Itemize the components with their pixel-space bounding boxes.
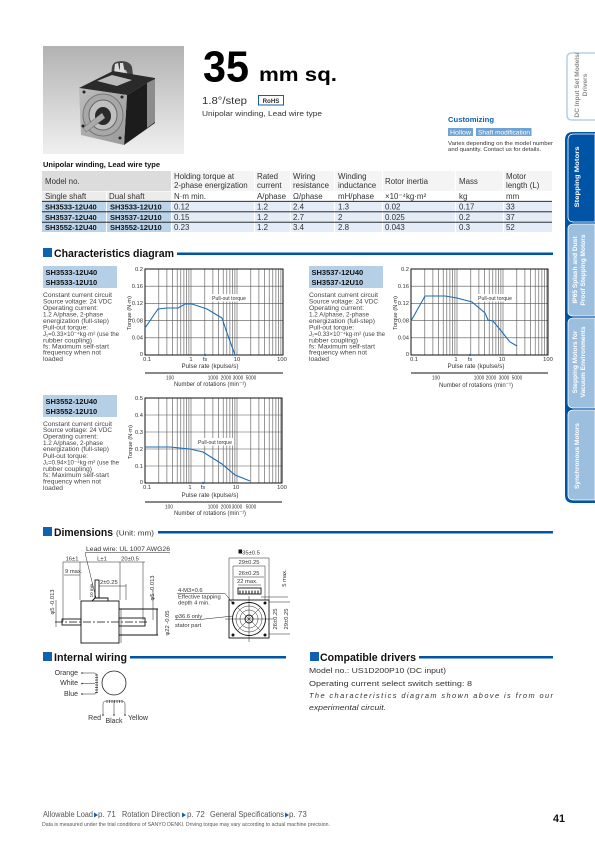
drawing: motor side view (50, 546, 171, 643)
spec table: 1.2 (257, 213, 268, 222)
table title: Unipolar winding, Lead wire type (43, 160, 160, 169)
chart: SH3552 pull-out torque (128, 396, 287, 517)
spec table: 0.2 (459, 213, 470, 222)
text block: SH3537 conditions: fs: Maximum self-start (309, 344, 375, 350)
spec table: Rated (257, 172, 278, 181)
chart: SH3537 pull-out torque: 10 (499, 357, 505, 363)
callout: mounting holes (175, 588, 233, 629)
side tabs: motor categories (565, 132, 595, 503)
drawing: motor front view: 26±0.25 (239, 571, 259, 577)
spec table: SH3552-12U40 (45, 223, 97, 232)
drawing: motor side view: φ5 -0.013 (150, 575, 156, 601)
text block: SH3533 conditions: J₁=0.33×10⁻⁴kg·m² (use the (43, 331, 119, 338)
chart: SH3533 pull-out torque: 0.12 (132, 301, 143, 307)
drawing: motor side view: 2±0.25 (100, 580, 118, 586)
title: 35 (203, 42, 249, 92)
spec table: 0.02 (385, 202, 400, 212)
spec table: 0.043 (385, 223, 405, 232)
chart: SH3552 pull-out torque: 0.5 (135, 396, 143, 402)
spec table: mH/phase (338, 192, 375, 201)
chart: SH3552 pull-out torque: 0.1 (135, 464, 143, 470)
heading: compatible drivers (310, 652, 553, 664)
chart: SH3533 pull-out torque (127, 267, 287, 388)
spec table: SH3537-12U40 (45, 213, 97, 222)
tab: stepping motors (568, 134, 595, 222)
drawing: motor side view: L±1 (97, 556, 107, 562)
text block: SH3537 conditions: Pull-out torque: (309, 324, 354, 332)
wiring diagram: White (60, 680, 78, 687)
spec table: Ω/phase (293, 192, 323, 201)
drawing: motor front view: 22 max. (237, 579, 258, 585)
chart: SH3537 pull-out torque: 1000 (474, 376, 484, 382)
chart: SH3552 pull-out torque: 1000 (208, 504, 218, 510)
heading: internal wiring (43, 652, 286, 664)
chart: SH3533 pull-out torque: 2000 (221, 376, 231, 382)
drawing: motor front view (225, 550, 290, 642)
text block: SH3552 conditions: 1.2 A/phase, 2-phase (43, 440, 103, 447)
title (203, 42, 337, 92)
spec table: 1.2 (257, 202, 268, 212)
text block: SH3552 conditions: Operating current: (43, 434, 98, 440)
heading: compatible drivers: Compatible drivers (320, 652, 416, 664)
chart: SH3537 pull-out torque: 0.12 (398, 301, 409, 307)
chart: SH3537 pull-out torque: 100 (432, 376, 440, 382)
spec table: Holding torque at (174, 172, 235, 181)
chart: SH3533 pull-out torque: 3000 (233, 376, 243, 382)
spec table: current (257, 181, 282, 190)
text block: compatible drivers: Operating current select switch setting: 8 (309, 679, 472, 688)
tab: vacuum stepping motors (568, 318, 595, 408)
spec table: SH3533-12U10 (110, 202, 162, 212)
chart: SH3537 pull-out torque: 3000 (499, 376, 509, 382)
text block: SH3537 conditions (309, 292, 385, 363)
text block: SH3537 conditions: loaded (309, 356, 329, 363)
callout: mounting holes: depth 4 min. (178, 600, 210, 606)
spec table: 1.2 (257, 223, 268, 232)
wiring diagram: Orange (55, 670, 78, 677)
customizing block: and quantity. Contact us for details. (448, 147, 541, 153)
chart: SH3552 pull-out torque: 0.2 (135, 447, 143, 453)
chart: SH3552 pull-out torque: Number of rotations (min⁻¹) (174, 510, 246, 517)
heading: dimensions: (Unit: mm) (116, 530, 154, 538)
chart: SH3533 pull-out torque: 100 (166, 376, 174, 382)
customizing block: Customizing (448, 115, 494, 124)
spec table: mm (506, 192, 520, 201)
chart: SH3533 pull-out torque: 0.1 (143, 357, 151, 363)
spec table: 0.15 (174, 213, 190, 222)
chart: SH3552 pull-out torque: 10 (233, 485, 239, 491)
spec table: kg (459, 192, 467, 201)
spec table: SH3552-12U10 (110, 223, 162, 232)
chart: SH3533 pull-out torque: 0.2 (135, 267, 143, 273)
text block: SH3552 conditions: frequency when not (43, 478, 101, 486)
chart: SH3552 pull-out torque: 0.1 (143, 485, 151, 491)
tab: vacuum stepping motors: Stepping Motors for (572, 330, 579, 393)
drawing: motor front view: 29±0.25 (284, 609, 290, 629)
spec table: Single shaft (45, 192, 87, 201)
chart: SH3533 pull-out torque: Pulse rate (kpulse/s) (182, 363, 238, 370)
text block: SH3537 conditions: 1.2 A/phase, 2-phase (309, 312, 369, 318)
footer references (43, 810, 307, 819)
drawing: motor side view: Lead wire: UL 1007 AWG26 (86, 546, 170, 553)
footer references: p. 72 (187, 810, 205, 819)
text block: SH3533 conditions: fs: Maximum self-start (43, 344, 109, 350)
spec table: 0.23 (174, 223, 190, 232)
heading: internal wiring: Internal wiring (54, 652, 127, 664)
spec table: Rotor inertia (385, 177, 429, 186)
footer references: p. 71 (98, 810, 116, 819)
chart: SH3537 pull-out torque: 2000 (486, 376, 496, 382)
title: mm sq. (259, 65, 337, 86)
chart: SH3537 pull-out torque: Torque (N·m) (393, 296, 399, 330)
customizing block: Hollow (450, 130, 471, 136)
tab: dust proof stepping motors (568, 224, 595, 316)
spec table: 0.3 (459, 223, 471, 232)
chart: SH3533 pull-out torque: 0.08 (132, 318, 143, 324)
spec table: 2.4 (293, 202, 305, 212)
spec table: Dual shaft (109, 192, 145, 201)
spec table: Mass (459, 177, 478, 186)
spec table: 37 (506, 213, 515, 222)
side tab: DC input set models: Drivers (582, 73, 589, 96)
chart: SH3537 pull-out torque: 0 (406, 352, 409, 358)
chart: SH3552 pull-out torque: fs (201, 485, 205, 491)
customizing block: Varies depending on the model number (448, 141, 553, 147)
spec table: resistance (293, 181, 330, 190)
text block: SH3533 conditions: Operating current: (43, 305, 98, 312)
text block: SH3552 conditions: Source voltage: 24 VDC (43, 427, 112, 434)
chart: SH3533 pull-out torque: Pull-out torque (212, 296, 246, 302)
spec table: 52 (506, 223, 515, 232)
chart: SH3552 pull-out torque: 0.4 (135, 413, 144, 419)
chart: SH3537 pull-out torque: 0.08 (398, 318, 409, 324)
text block: SH3537 conditions: rubber coupling) (309, 338, 358, 344)
tab: synchronous motors (568, 410, 595, 500)
text block: SH3537 conditions: Source voltage: 24 VDC (309, 298, 378, 306)
text block: SH3537 conditions: Operating current: (309, 305, 364, 312)
drawing: motor front view: 35±0.5 (242, 550, 260, 556)
heading: dimensions (43, 527, 553, 539)
text block: SH3552 conditions: J₁=0.94×10⁻⁴kg·m² (use the (43, 460, 119, 466)
tab: stepping motors: Stepping Motors (574, 146, 581, 207)
chart: SH3533 pull-out torque: 0.04 (132, 336, 144, 342)
text block: compatible drivers: The characteristics diagram shown above is from our (309, 691, 554, 700)
tab: synchronous motors: Synchronous Motors (574, 423, 581, 489)
drawing: motor side view: φ22 -0.05 (165, 610, 171, 636)
spec table: 33 (506, 202, 515, 212)
text block: compatible drivers: Model no.: US1D200P10 (DC input) (309, 666, 446, 675)
text block: compatible drivers: experimental circuit. (309, 703, 386, 712)
chart: SH3533 pull-out torque: Torque (N·m) (127, 296, 133, 330)
step angle and RoHS (202, 96, 284, 107)
chart: SH3552 pull-out torque: 1 (188, 485, 192, 491)
chart: SH3552 pull-out torque: 5000 (246, 504, 256, 510)
drawing: motor side view: 10 min. (89, 583, 94, 597)
footer references: Allowable Load (43, 810, 93, 819)
panel: SH3533 label: SH3533-12U10 (46, 278, 97, 287)
text block: SH3552 conditions: energization (full-step) (43, 446, 109, 453)
text block: SH3552 conditions: Pull-out torque: (43, 453, 88, 460)
drawing: motor side view: 9 max. (65, 569, 83, 575)
text block: SH3533 conditions: 1.2 A/phase, 2-phase (43, 312, 103, 318)
spec table: 2-phase energization (174, 181, 248, 190)
panel: SH3537 label: SH3537-12U10 (312, 278, 363, 287)
text block: SH3533 conditions: frequency when not (43, 350, 101, 356)
chart: SH3537 pull-out torque: fs (468, 357, 472, 363)
text block: SH3533 conditions: Pull-out torque: (43, 324, 88, 332)
chart: SH3537 pull-out torque (393, 267, 553, 389)
chart: SH3552 pull-out torque: Torque (N·m) (128, 425, 134, 459)
chart: SH3552 pull-out torque: 2000 (221, 504, 231, 510)
spec table: 1.3 (338, 202, 350, 212)
footnote: Data is measured under the trial conditions of SANYO DENKI. Driving torque may vary according to actual machine precision. (42, 822, 330, 828)
text block: SH3537 conditions: energization (full-step) (309, 318, 375, 325)
spec table: Model no. (45, 177, 80, 186)
callout: mounting holes: Effective tapping (178, 594, 221, 600)
spec table: 2 (338, 213, 342, 222)
drawing: motor side view: 16±1 (66, 556, 78, 562)
spec table: Winding (338, 172, 367, 181)
step angle and RoHS: RoHS (263, 98, 279, 105)
subtitle: Unipolar winding, Lead wire type (202, 109, 322, 118)
spec table: inductance (338, 181, 377, 190)
chart: SH3533 pull-out torque: 5000 (246, 376, 256, 382)
spec table: ×10⁻⁴kg·m² (385, 192, 426, 201)
chart: SH3552 pull-out torque: Pull-out torque (198, 440, 232, 446)
text block: SH3533 conditions: loaded (43, 356, 63, 363)
spec table: 2.8 (338, 223, 350, 232)
tab: dust proof stepping motors: Proof Stepping Motors (580, 234, 587, 306)
wiring diagram: Red (88, 715, 101, 722)
wiring diagram: Black (105, 718, 123, 725)
text block: SH3552 conditions (43, 421, 119, 492)
text block: SH3537 conditions: J₁=0.33×10⁻⁴kg·m² (use the (309, 331, 385, 338)
wiring diagram: Blue (64, 691, 78, 698)
text block: SH3533 conditions: energization (full-step) (43, 318, 109, 325)
callout: mounting holes: stator part (175, 623, 201, 629)
chart: SH3552 pull-out torque: 100 (277, 485, 287, 491)
text block: SH3552 conditions: rubber coupling) (43, 466, 92, 473)
chart: SH3533 pull-out torque: Number of rotations (min⁻¹) (174, 381, 246, 388)
footer references: General Specifications (210, 810, 284, 819)
chart: SH3533 pull-out torque: 1000 (208, 376, 218, 382)
text block: SH3533 conditions: Constant current circuit (43, 292, 112, 299)
page number: 41 (553, 813, 565, 825)
chart: SH3552 pull-out torque: Pulse rate (kpulse/s) (182, 492, 238, 499)
photo: stepping motor (43, 46, 184, 154)
wiring diagram (55, 670, 149, 725)
chart: SH3552 pull-out torque: 3000 (232, 504, 242, 510)
text block: SH3537 conditions: frequency when not (309, 350, 367, 356)
chart: SH3533 pull-out torque: 0 (140, 352, 143, 358)
text block: SH3552 conditions: Constant current circuit (43, 421, 112, 428)
text block: SH3533 conditions: Source voltage: 24 VDC (43, 298, 112, 306)
customizing block (448, 115, 553, 153)
chart: SH3533 pull-out torque: 1 (189, 357, 193, 363)
chart: SH3552 pull-out torque: 0 (140, 480, 143, 486)
heading: characteristics diagram (43, 248, 553, 260)
spec table: 0.17 (459, 202, 474, 212)
spec table (42, 171, 552, 232)
drawing: motor front view: 29±0.25 (239, 560, 259, 566)
tab: vacuum stepping motors: Vacuum Environments (580, 326, 587, 398)
spec table: SH3533-12U40 (45, 202, 97, 212)
spec table: 3.4 (293, 223, 305, 232)
footer references: Rotation Direction (122, 810, 180, 819)
chart: SH3533 pull-out torque: 100 (277, 357, 287, 363)
heading: characteristics diagram: Characteristics diagram (54, 248, 174, 260)
text block: SH3552 conditions: fs: Maximum self-start (43, 472, 109, 479)
spec table: 0.025 (385, 213, 405, 222)
callout: mounting holes: 4-M3×0.6 (178, 588, 203, 594)
drawing: motor front view: 5 max. (282, 569, 288, 587)
text block: SH3552 conditions: loaded (43, 485, 63, 492)
side tab: DC input set models: DC Input Set Models/ (574, 52, 581, 118)
panel: SH3552 label (43, 395, 117, 417)
panel: SH3537 label (309, 266, 383, 288)
chart: SH3533 pull-out torque: 0.16 (132, 284, 143, 290)
chart: SH3537 pull-out torque: 0.16 (398, 284, 409, 290)
chart: SH3537 pull-out torque: Pull-out torque (478, 296, 512, 302)
chart: SH3552 pull-out torque: 0.3 (135, 430, 143, 436)
drawing: motor side view: φ5 -0.013 (50, 589, 56, 615)
chart: SH3537 pull-out torque: 0.04 (398, 336, 410, 342)
heading: dimensions: Dimensions (54, 527, 113, 539)
spec table: Motor (506, 172, 527, 181)
chart: SH3537 pull-out torque: 100 (543, 357, 553, 363)
chart: SH3537 pull-out torque: Number of rotations (min⁻¹) (439, 382, 513, 389)
callout: mounting holes: φ36.6 only (175, 614, 202, 620)
spec table: N·m min. (174, 192, 206, 201)
spec table: A/phase (257, 192, 287, 201)
panel: SH3552 label: SH3552-12U40 (46, 397, 97, 406)
wiring diagram: Yellow (128, 715, 149, 722)
drawing: motor front view: 26±0.25 (273, 609, 279, 629)
text block: compatible drivers (309, 666, 554, 712)
chart: SH3537 pull-out torque: Pulse rate (kpulse/s) (448, 363, 504, 370)
panel: SH3537 label: SH3537-12U40 (312, 268, 363, 277)
panel: SH3552 label: SH3552-12U10 (46, 407, 97, 416)
spec table: Wiring (293, 172, 315, 181)
chart: SH3537 pull-out torque: 1 (454, 357, 458, 363)
panel: SH3533 label (43, 266, 117, 288)
panel: SH3533 label: SH3533-12U40 (46, 268, 97, 277)
spec table: 0.12 (174, 202, 189, 212)
chart: SH3537 pull-out torque: 0.2 (401, 267, 409, 273)
spec table: length (L) (506, 181, 540, 190)
text block: SH3537 conditions: Constant current circuit (309, 292, 378, 299)
drawing: motor side view: 20±0.5 (121, 556, 139, 562)
text block: SH3533 conditions: rubber coupling) (43, 338, 92, 344)
spec table: SH3537-12U10 (110, 213, 162, 222)
side tab: DC input set models (567, 52, 595, 120)
chart: SH3537 pull-out torque: 5000 (512, 376, 522, 382)
step angle and RoHS: 1.8°/step (202, 96, 247, 107)
spec table: 2.7 (293, 213, 304, 222)
chart: SH3537 pull-out torque: 0.1 (410, 357, 418, 363)
chart: SH3533 pull-out torque: 10 (234, 357, 240, 363)
chart: SH3552 pull-out torque: 100 (165, 504, 173, 510)
footer references: p. 73 (289, 810, 307, 819)
chart: SH3533 pull-out torque: fs (203, 357, 207, 363)
tab: dust proof stepping motors: IP65 Splash and Dust (572, 236, 579, 304)
customizing block: Shaft modification (478, 130, 530, 136)
text block: SH3533 conditions (43, 292, 119, 363)
